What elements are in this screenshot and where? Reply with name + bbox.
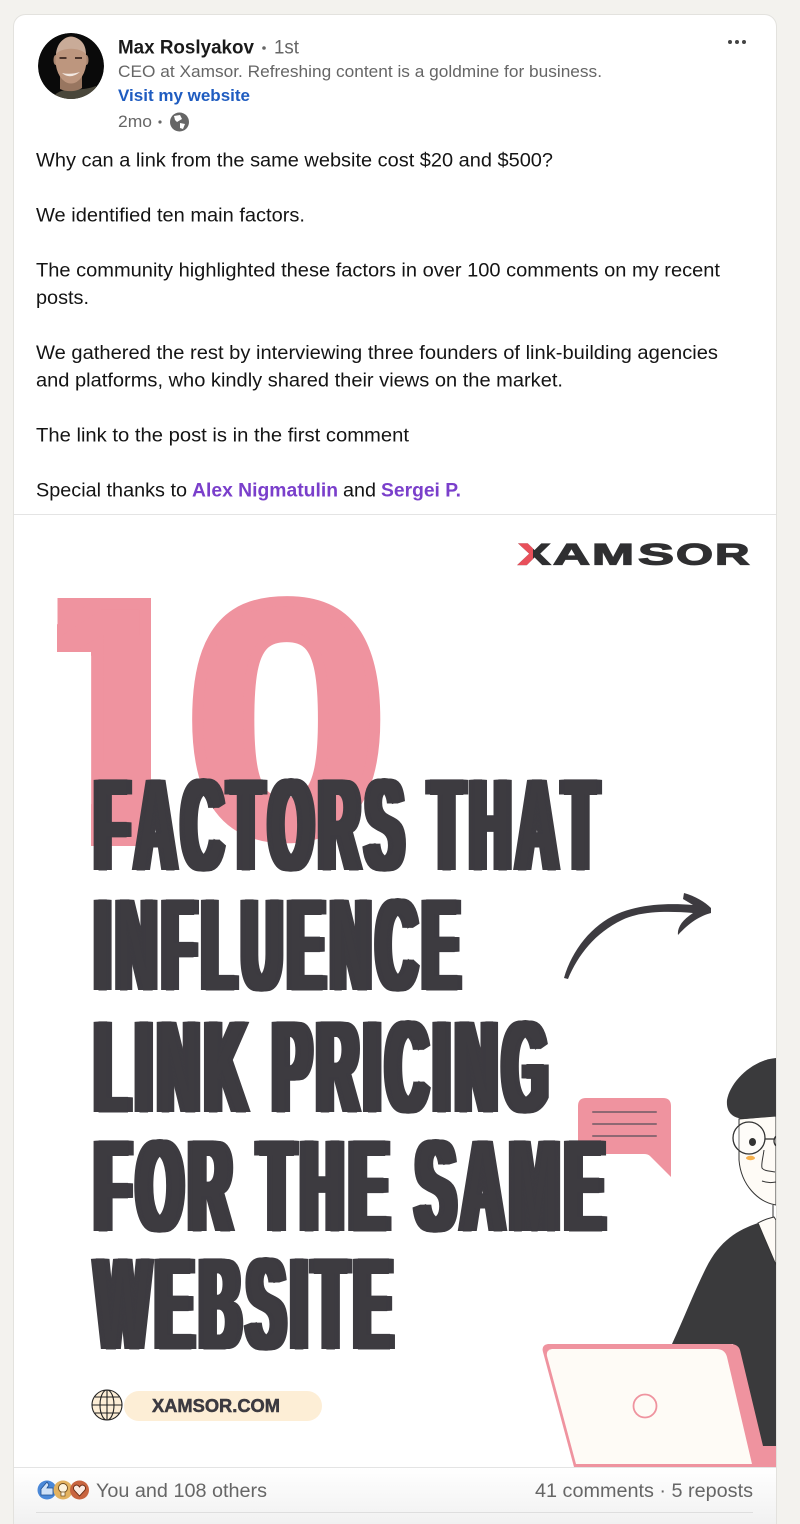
logo: Xamsor: M	[592, 538, 634, 572]
title: INFLUENCE	[94, 871, 465, 1018]
post body text	[36, 150, 721, 502]
post body text: We identified ten main factors.	[36, 206, 305, 226]
post body text: and	[343, 480, 376, 502]
post body text: and platforms, who kindly shared their views on the market.	[36, 370, 563, 392]
website link: Visit my website	[118, 86, 250, 105]
avatar photo	[38, 33, 104, 100]
post age and visibility: 2mo	[118, 112, 152, 131]
title: LINK PRICING	[94, 993, 553, 1140]
logo: Xamsor	[517, 543, 750, 566]
reactions count: You and 108 others	[96, 1481, 267, 1502]
big number 10: 0	[183, 532, 390, 906]
post body text: We gathered the rest by interviewing three founders of link-building agencies	[36, 343, 718, 364]
arrow	[564, 893, 711, 979]
title: FACTORS THAT	[94, 751, 603, 898]
big number 10	[57, 596, 380, 846]
reaction icons	[38, 1480, 89, 1500]
website badge: XAMSOR.COM	[152, 1396, 280, 1416]
illustration: person at laptop	[543, 1058, 788, 1467]
more menu icon	[728, 40, 746, 44]
comments and reposts count: 41 comments · 5 reposts	[535, 1481, 753, 1502]
post body text: The community highlighted these factors in over 100 comments on my recent	[36, 260, 721, 282]
big number 10: 1	[15, 527, 211, 921]
author headline: CEO at Xamsor. Refreshing content is a goldmine for business.	[118, 62, 602, 81]
post body text: Alex Nigmatulin	[192, 480, 338, 502]
post body text: Special thanks to	[36, 480, 187, 502]
logo: Xamsor: X	[518, 538, 550, 572]
post age and visibility	[118, 112, 189, 132]
post body text: posts.	[36, 288, 89, 309]
post body text: The link to the post is in the first comment	[36, 426, 410, 446]
logo: Xamsor: R	[715, 538, 750, 572]
website badge	[92, 1390, 322, 1421]
author name: Max Roslyakov	[118, 38, 254, 58]
logo: Xamsor: A	[553, 538, 590, 572]
post body text: Sergei P.	[381, 480, 461, 502]
post body text: Why can a link from the same website cost $20 and $500?	[36, 150, 553, 172]
title	[90, 751, 610, 1377]
logo: Xamsor: S	[638, 538, 674, 572]
title: FOR THE SAME	[94, 1112, 610, 1259]
logo: Xamsor: O	[676, 538, 713, 572]
speech bubble	[578, 1098, 671, 1177]
title: WEBSITE	[96, 1230, 399, 1377]
logo: Xamsor: X	[518, 538, 550, 572]
author name: 1st	[274, 38, 300, 58]
